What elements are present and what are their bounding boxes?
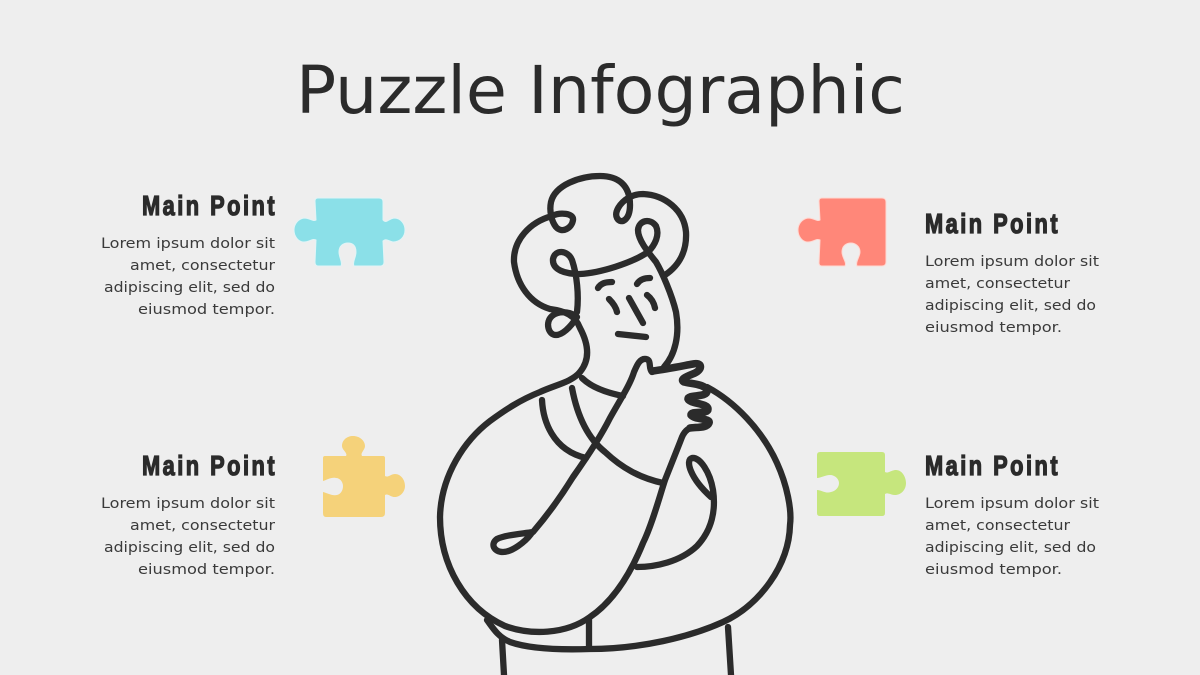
body text: amet, consectetur [925,276,1070,292]
body text: eiusmod tempor. [925,320,1062,336]
body text [101,496,275,578]
text block: top right [925,208,1099,336]
hand fingers [653,364,709,428]
body text: adipiscing elit, sed do [925,298,1096,314]
body text [925,496,1099,578]
body text: amet, consectetur [925,518,1070,534]
body text: Lorem ipsum dolor sit [925,496,1099,512]
heading: Main Point [925,450,1058,482]
body text: adipiscing elit, sed do [104,540,275,556]
body text: eiusmod tempor. [138,302,275,318]
text block: top left [101,190,275,318]
collar [582,378,623,396]
body text: amet, consectetur [130,258,275,274]
body text: amet, consectetur [130,518,275,534]
body text: eiusmod tempor. [138,562,275,578]
heading: Main Point [925,208,1058,240]
body text: Lorem ipsum dolor sit [925,254,1099,270]
face and fringe [553,221,677,367]
character illustration [440,176,790,675]
hair and head outline [514,176,686,372]
puzzle piece: blue [294,198,405,266]
body text: adipiscing elit, sed do [104,280,275,296]
text block: bottom left [101,450,275,578]
body text: Lorem ipsum dolor sit [101,236,275,252]
body text [925,254,1099,336]
body left outline and arm [440,372,696,632]
puzzle piece: red [798,198,886,266]
text block: bottom right [925,450,1099,578]
face features [598,278,655,337]
body text: eiusmod tempor. [925,562,1062,578]
inner arm [637,458,714,567]
legs and centre line [502,620,731,675]
heading: Main Point [142,190,275,222]
body text [101,236,275,318]
ear loop [548,312,577,335]
body text: adipiscing elit, sed do [925,540,1096,556]
title: Puzzle Infographic [296,52,905,129]
heading: Main Point [142,450,275,482]
body text: Lorem ipsum dolor sit [101,496,275,512]
right shoulder and waist [487,387,790,649]
puzzle piece: yellow [323,436,405,517]
thumb and pointing arm [493,359,652,552]
puzzle piece: green [817,452,906,516]
